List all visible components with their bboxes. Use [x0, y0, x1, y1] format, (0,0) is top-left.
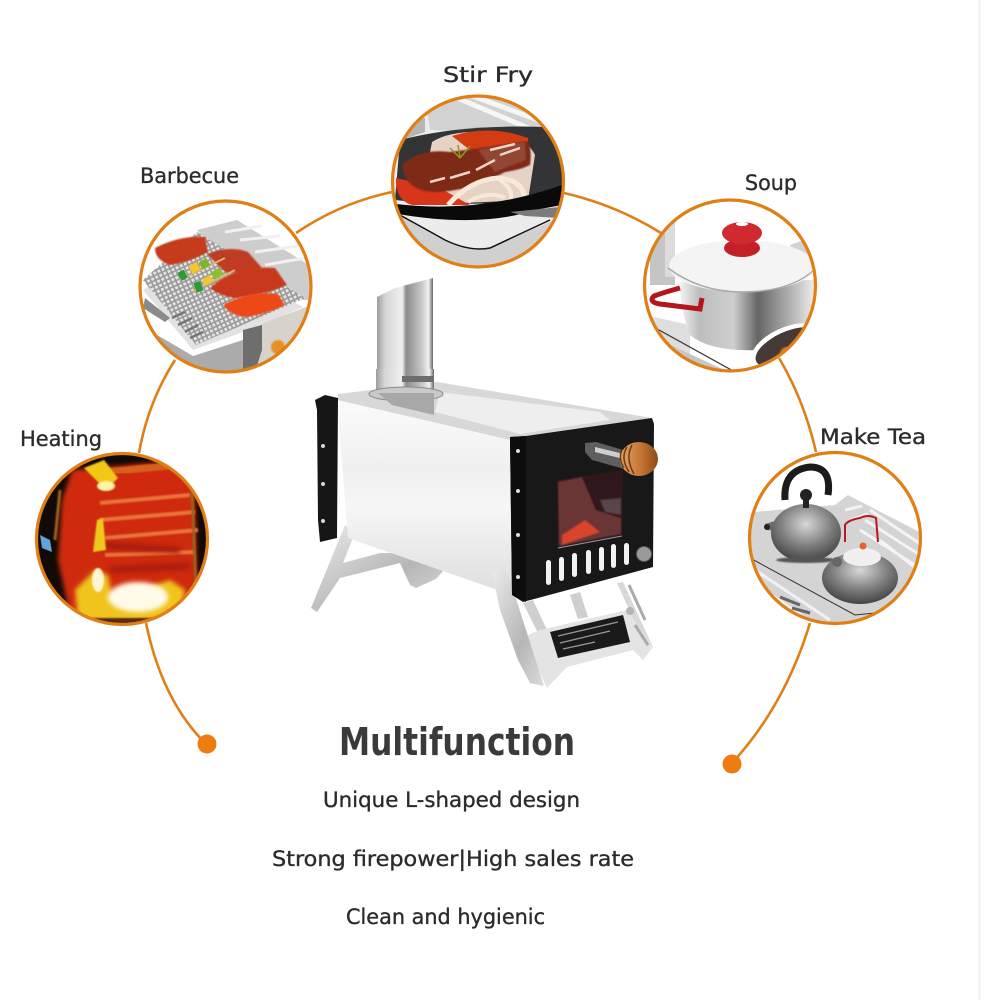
label: barbecue: Barbecue: [140, 164, 239, 188]
circle: barbecue: [138, 199, 314, 375]
stove side panel: [337, 400, 512, 595]
circle: stir fry: [390, 94, 566, 270]
rear folding leg: [311, 525, 444, 612]
chimney: [369, 278, 443, 415]
warning sticker: [550, 615, 630, 658]
feature line 1: Unique L-shaped design: [323, 788, 580, 812]
front right leg and foot plate: [492, 568, 653, 688]
connector arcs: [139, 192, 816, 762]
circle: heating: [34, 452, 210, 628]
stove top surface: [337, 382, 652, 440]
label: make tea: Make Tea: [820, 425, 926, 449]
label: soup: Soup: [745, 171, 797, 195]
air control screw: [636, 546, 652, 562]
viewing window with fire: [558, 470, 623, 548]
product: stove: [311, 278, 658, 688]
stove front plate: [510, 418, 654, 602]
air slots: [546, 543, 629, 585]
feature line 2: Strong firepower|High sales rate: [272, 847, 634, 872]
connector end dots: [198, 734, 742, 774]
label: heating: Heating: [20, 427, 102, 451]
stove rear black strip: [315, 395, 338, 542]
door handle and knob: [585, 442, 658, 476]
feature line 3: Clean and hygienic: [346, 905, 545, 929]
circle: soup: [643, 198, 825, 376]
circle: make tea: [748, 451, 925, 630]
label: stir fry: Stir Fry: [443, 63, 533, 87]
heading: Multifunction: [339, 720, 575, 764]
